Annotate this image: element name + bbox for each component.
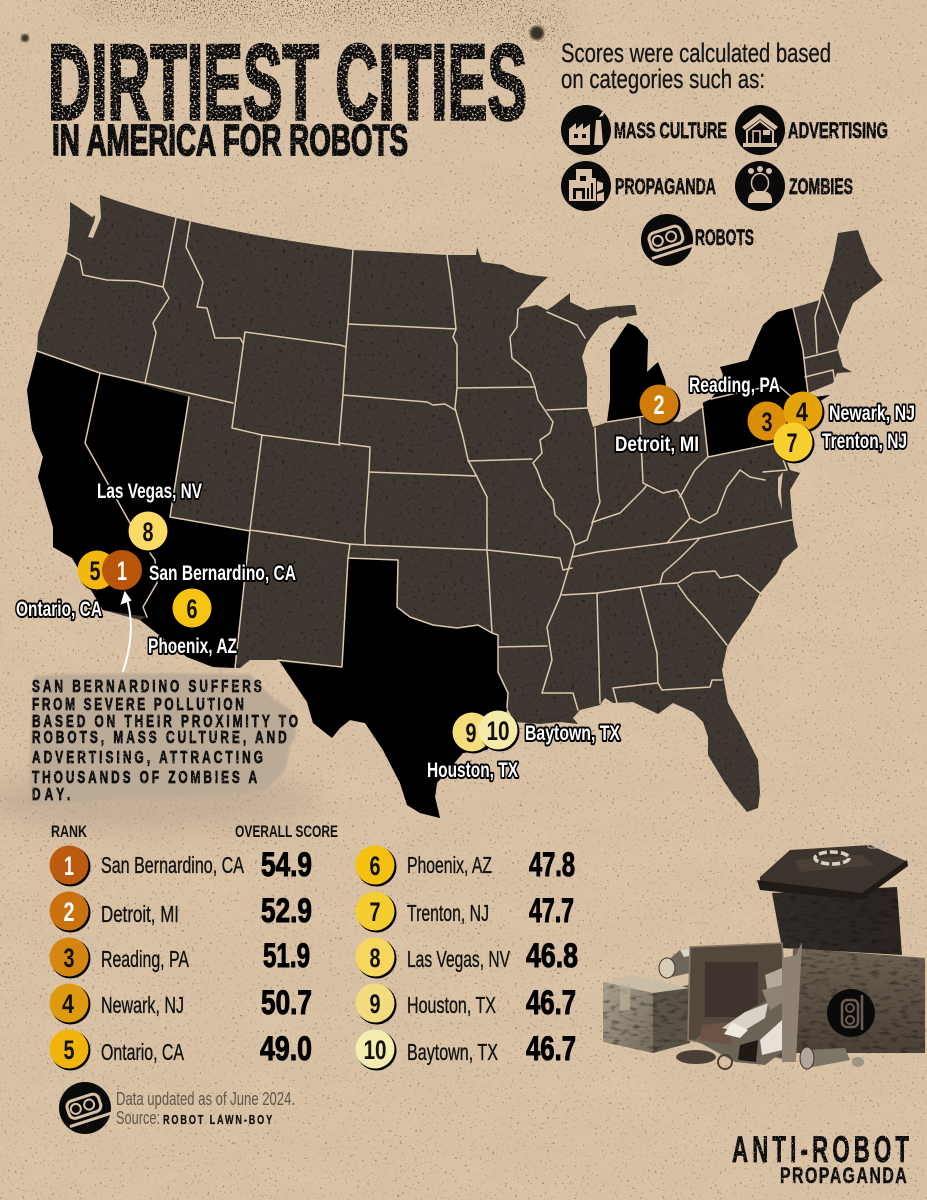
icon: mass culture factory: [561, 105, 611, 155]
row 10: 46.7: [526, 1030, 576, 1068]
row 10: 10: [364, 1035, 386, 1065]
row 9: 46.7: [526, 984, 576, 1022]
row 1: San Bernardino, CA: [101, 852, 244, 878]
logo: Anti-Robot Propaganda: PROPAGANDA: [780, 1165, 907, 1189]
row 1: 54.9: [261, 846, 312, 884]
row 4: Newark, NJ: [101, 992, 184, 1018]
row 2: Detroit, MI: [101, 901, 179, 927]
callout text: BASED ON THEIR PROXIMITY TO: [32, 712, 298, 732]
marker 1: [102, 550, 142, 590]
title: DIRTIEST CITIES: [48, 22, 527, 142]
icon: robot logo: [59, 1082, 112, 1134]
map city labels: Phoenix, AZ: [148, 635, 237, 658]
row 3: Reading, PA: [101, 946, 189, 972]
marker 1: 1: [117, 556, 127, 586]
marker 4: 4: [796, 397, 808, 427]
source line: [116, 1108, 273, 1128]
map city labels: Ontario, CA: [16, 598, 102, 621]
row 9: [356, 984, 576, 1024]
marker 2: 2: [654, 390, 664, 420]
row 2: 52.9: [261, 892, 312, 930]
state: New York and Pennsylvania: [702, 308, 830, 457]
row 7: Trenton, NJ: [407, 900, 489, 926]
map city labels: Reading, PA: [689, 374, 780, 397]
row 8: [356, 937, 578, 978]
icon: robots: [641, 214, 694, 266]
marker 4: [784, 392, 824, 432]
row 10: [356, 1030, 576, 1070]
row 7: 47.7: [529, 892, 574, 930]
marker 8: [128, 512, 170, 552]
marker 5: [78, 550, 118, 592]
arrow: [122, 593, 131, 671]
row 4: [50, 984, 312, 1024]
marker 10: 10: [486, 716, 510, 746]
illustration: overturned bins and trash: [603, 844, 925, 1069]
marker 5: 5: [90, 556, 100, 586]
row 8: 46.8: [526, 937, 578, 975]
row 3: 51.9: [263, 937, 310, 975]
callout text: ADVERTISING, ATTRACTING: [32, 748, 263, 768]
label: zombies: ZOMBIES: [789, 174, 853, 199]
upright bin: [757, 844, 908, 955]
callout text: DAY.: [32, 785, 70, 805]
row 7: 7: [370, 897, 380, 927]
label: propaganda: PROPAGANDA: [615, 174, 716, 199]
spray can: [800, 1047, 864, 1069]
icon: propaganda building: [561, 161, 611, 211]
row 3: 3: [64, 943, 74, 973]
ranking table: [50, 822, 578, 1070]
marker 9: 9: [466, 718, 476, 748]
icon: advertising house: [735, 105, 785, 155]
map: state borders: [37, 218, 840, 710]
callout text: THOUSANDS OF ZOMBIES A: [32, 768, 257, 788]
row 2: [50, 892, 312, 932]
row 8: Las Vegas, NV: [407, 946, 510, 972]
state: California and Nevada: [27, 351, 189, 617]
cardboard box: [603, 975, 690, 1053]
marker 3: 3: [762, 407, 772, 437]
marker 7: [774, 422, 814, 464]
map city labels: San Bernardino, CA: [149, 562, 296, 585]
logo: Anti-Robot Propaganda: ANTI-ROBOT: [732, 1129, 909, 1170]
map: dark land mass: [27, 195, 883, 818]
row 3: [50, 937, 310, 978]
logo: Anti-Robot Propaganda: [732, 1129, 909, 1189]
footer source: [59, 1082, 295, 1134]
tipped bin: [688, 942, 925, 1062]
row 4: 50.7: [261, 984, 312, 1022]
map: Puget Sound cut-out: [88, 200, 101, 238]
row 10: Baytown, TX: [407, 1039, 498, 1065]
row 5: [50, 1030, 312, 1070]
state: Arizona: [140, 517, 250, 668]
callout patch: [30, 673, 296, 806]
map markers: [78, 384, 824, 754]
marker 2: [640, 384, 680, 426]
row 6: 47.8: [529, 846, 575, 884]
categories intro text: on categories such as:: [561, 64, 765, 94]
state: Michigan lower peninsula: [607, 323, 668, 422]
marker 7: 7: [786, 428, 798, 458]
callout text: SAN BERNARDINO SUFFERS: [32, 677, 262, 697]
row 6: Phoenix, AZ: [407, 852, 492, 878]
row 2: 2: [64, 897, 74, 927]
category legend: [561, 105, 888, 266]
marker 6: 6: [186, 594, 198, 624]
fallen can on box: [659, 945, 712, 978]
row 6: [356, 846, 575, 886]
marker 6: [172, 588, 214, 630]
callout text: [32, 677, 298, 805]
callout text: FROM SEVERE POLLUTION: [32, 695, 244, 715]
data note: Data updated as of June 2024.: [116, 1089, 295, 1109]
trash pile: [676, 968, 782, 1069]
marker 9: [452, 712, 494, 754]
marker 3: [748, 402, 788, 442]
icon: robot sticker on bin: [827, 989, 875, 1037]
map city labels: Detroit, MI: [615, 433, 699, 456]
row 1: [50, 846, 312, 886]
table headers: [51, 822, 338, 841]
icon: zombies person: [735, 161, 785, 211]
map city labels: Las Vegas, NV: [97, 480, 202, 503]
row 5: 5: [64, 1035, 74, 1065]
row 6: 6: [370, 851, 380, 881]
row 7: [356, 892, 574, 932]
callout text: ROBOTS, MASS CULTURE, AND: [32, 728, 287, 748]
label: robots: ROBOTS: [695, 225, 754, 250]
marker 10: [478, 710, 520, 752]
row 5: Ontario, CA: [101, 1039, 184, 1065]
source line: ROBOT LAWN-BOY: [163, 1114, 273, 1127]
categories intro text: [561, 38, 831, 94]
label: mass culture: MASS CULTURE: [614, 118, 727, 143]
row 9: Houston, TX: [407, 992, 496, 1018]
map city labels: Baytown, TX: [525, 722, 620, 745]
map city labels: Houston, TX: [427, 759, 518, 782]
row 9: 9: [370, 989, 380, 1019]
row 5: 49.0: [260, 1030, 312, 1068]
table headers: RANK: [51, 822, 88, 841]
US map: [27, 195, 883, 818]
map: Chesapeake cut-out: [778, 472, 783, 510]
subtitle: IN AMERICA FOR ROBOTS: [52, 116, 408, 165]
row 1: 1: [64, 851, 74, 881]
source line: Source:: [116, 1108, 160, 1128]
marker 8: 8: [142, 517, 154, 547]
row 8: 8: [370, 943, 380, 973]
categories intro text: Scores were calculated based: [561, 38, 831, 68]
state: Texas: [280, 558, 508, 818]
row 4: 4: [62, 989, 74, 1019]
table headers: OVERALL SCORE: [235, 822, 338, 841]
map city labels: [16, 374, 915, 782]
